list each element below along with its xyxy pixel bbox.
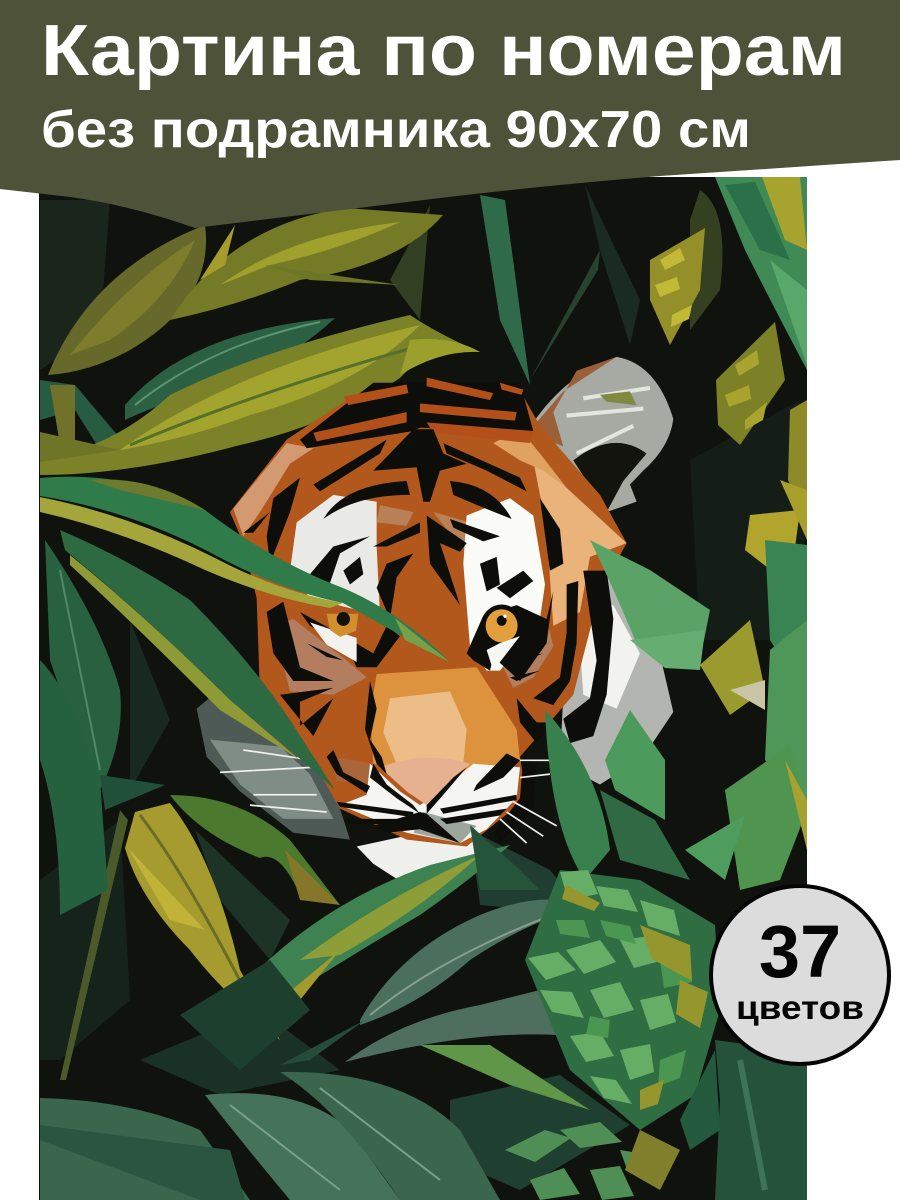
tiger: nose — [380, 758, 470, 805]
subtitle: без подрамника 90х70 см — [41, 101, 751, 159]
tiger: right eye — [481, 604, 522, 671]
leaves: bottom — [40, 1045, 590, 1200]
tiger: white eye patches — [290, 495, 545, 671]
tiger: mouth and chin — [340, 764, 520, 843]
tiger: whiskers — [220, 750, 557, 843]
title: Картина по номерам — [41, 11, 846, 91]
leaves: center lower — [180, 825, 590, 1070]
badge number: 37 — [759, 910, 841, 993]
tiger: head base — [230, 384, 627, 847]
leaves: lower-left olive and yellow — [125, 795, 340, 1040]
background foliage — [40, 185, 807, 1190]
tiger: left eye — [310, 612, 358, 662]
badge label: цветов — [736, 989, 864, 1026]
leaves: narrow over tiger — [40, 477, 450, 790]
tiger: muzzle — [330, 667, 520, 784]
tiger: fur left and right — [197, 547, 673, 881]
panel: jungle painting — [39, 177, 807, 1200]
badge: 37 colours — [711, 886, 889, 1064]
leaf: large yellow-olive — [40, 315, 480, 475]
tiger: ear — [533, 357, 673, 512]
tiger — [197, 357, 673, 881]
header banner — [0, 0, 900, 228]
leaves: top left olive group — [40, 208, 443, 450]
leaves: right middle — [545, 540, 807, 890]
leaves: bright green bush — [505, 870, 807, 1200]
tiger: orange forehead stripes — [313, 378, 533, 443]
tiger: light orange sides — [233, 429, 627, 695]
leaves: left side — [40, 540, 165, 915]
leaves: top right — [650, 177, 807, 585]
tiger: black forehead — [300, 383, 533, 448]
tiger: black stripes — [243, 429, 613, 843]
